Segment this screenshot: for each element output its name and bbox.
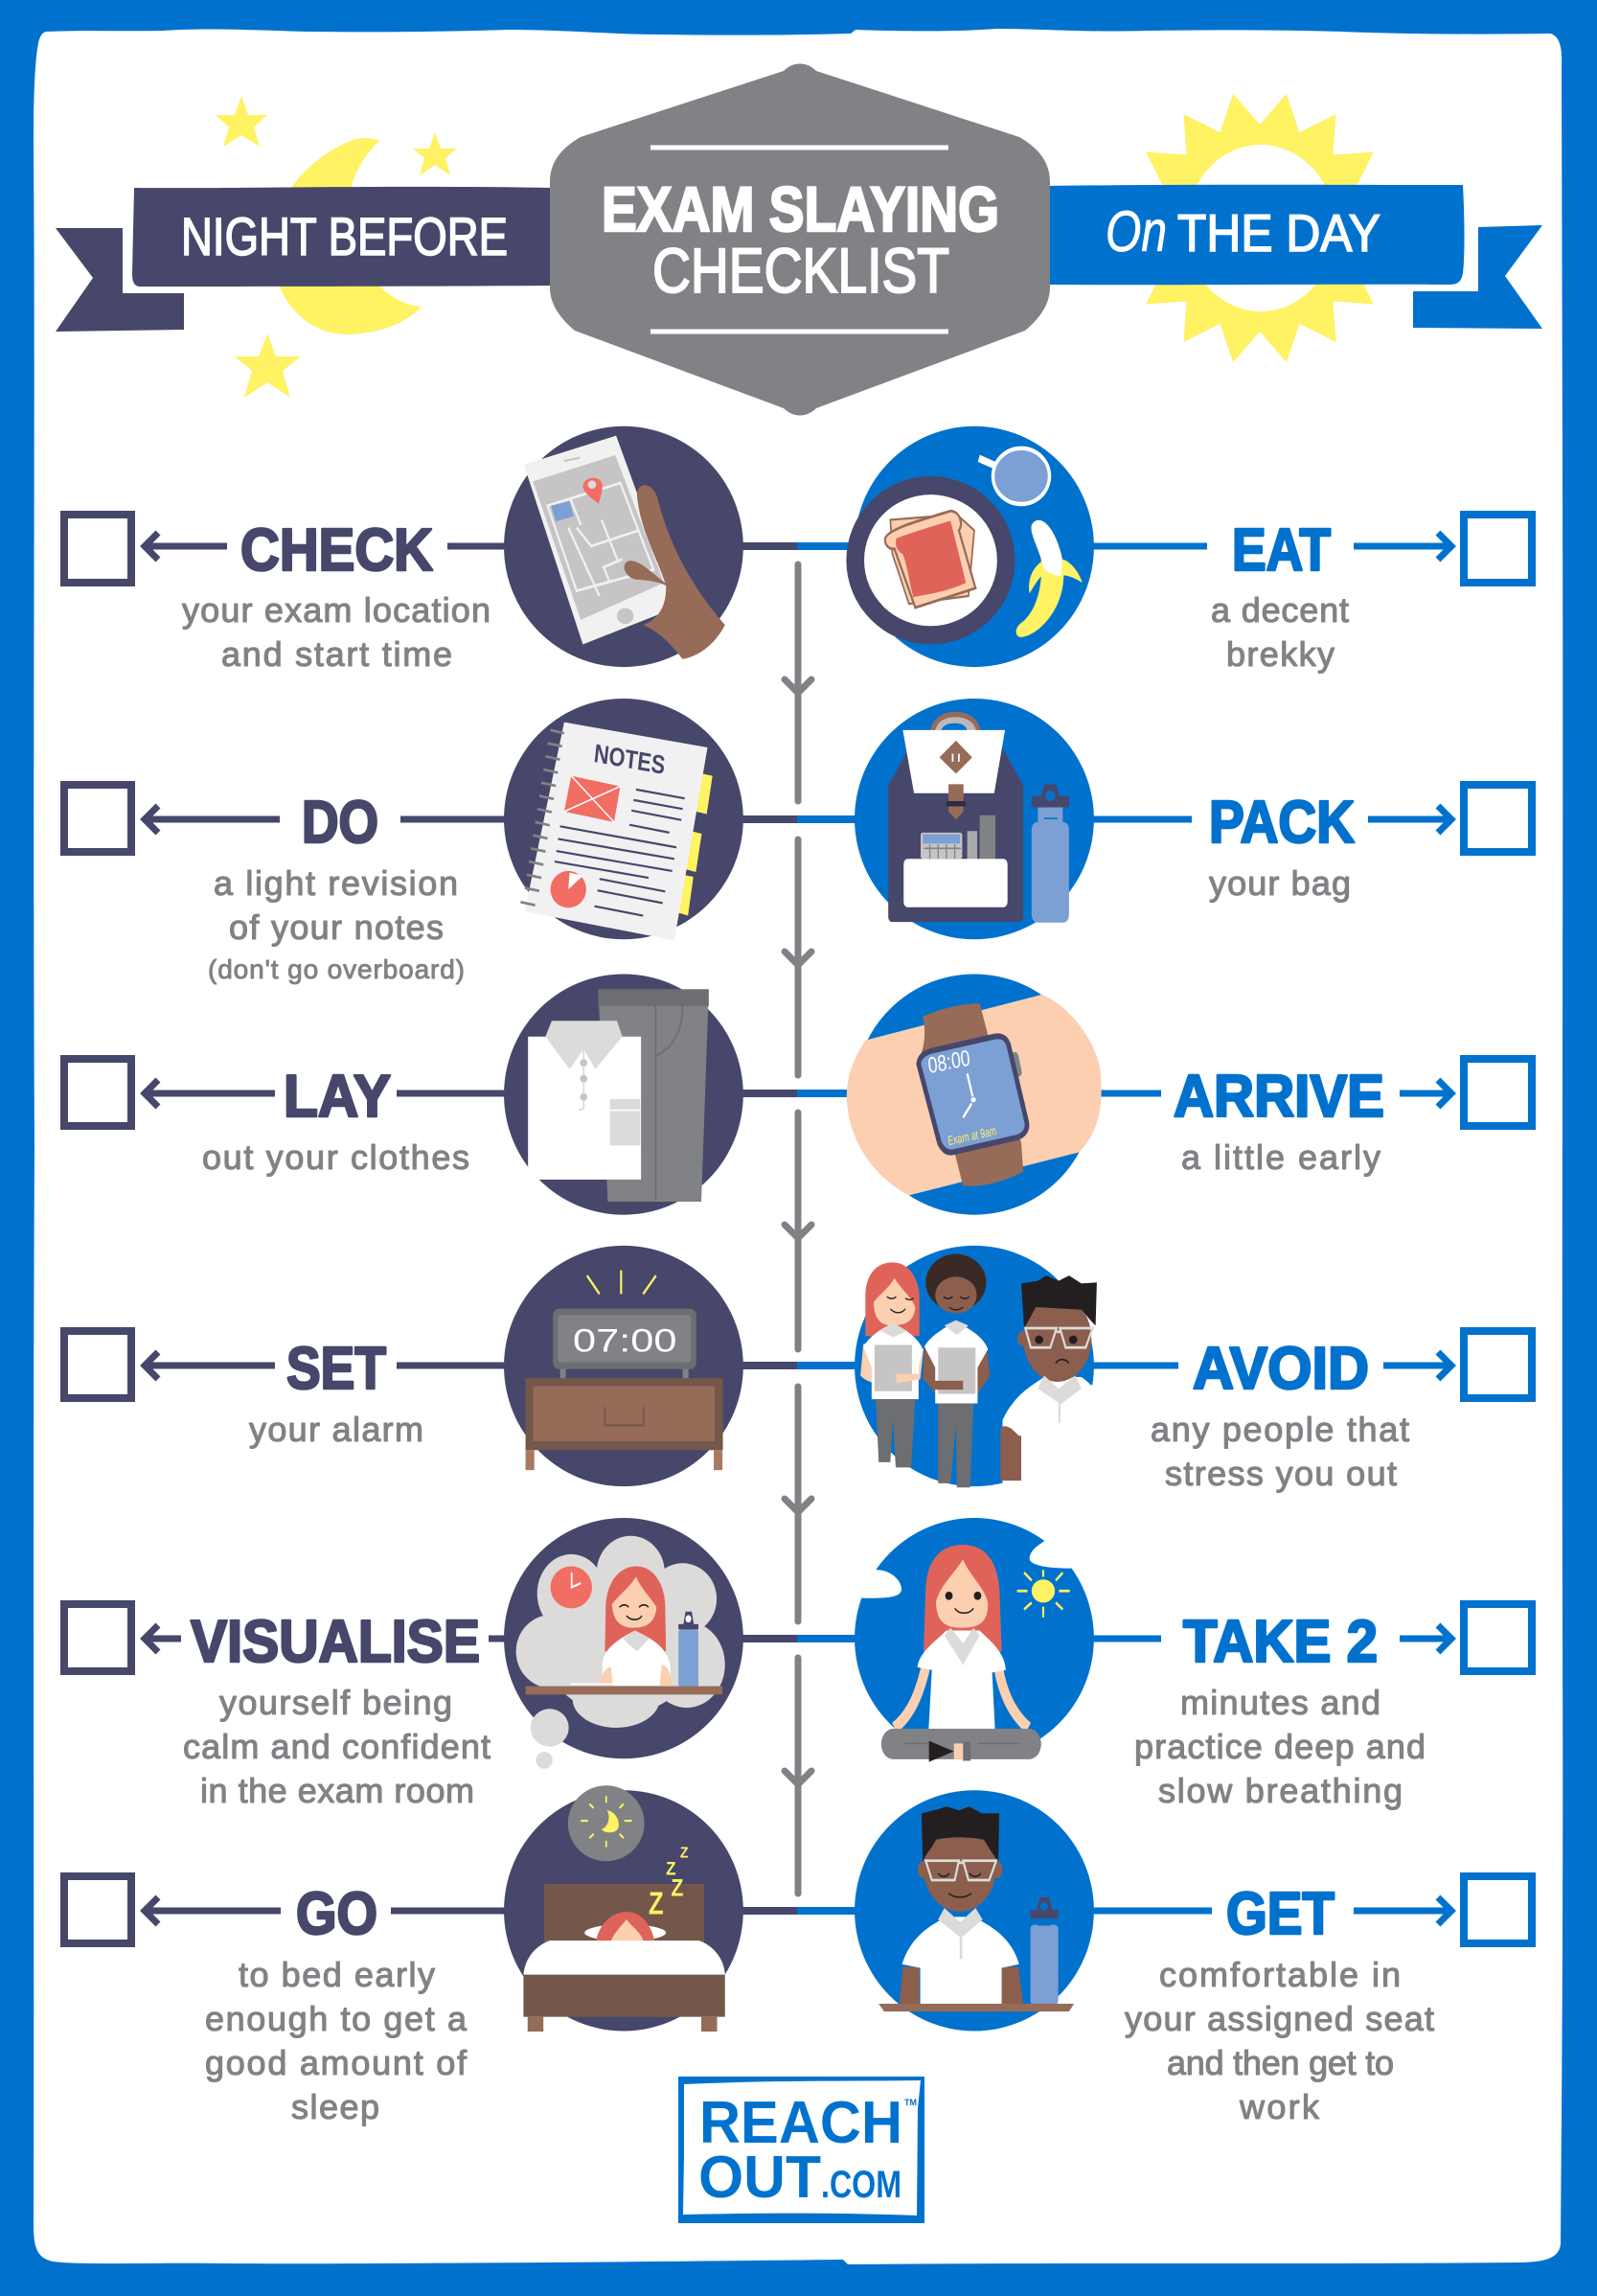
description: and start time xyxy=(221,634,452,674)
banner text: the day: THE DAY xyxy=(1177,203,1380,263)
description: calm and confident xyxy=(183,1727,491,1766)
checkbox xyxy=(64,1331,131,1398)
description xyxy=(208,863,465,984)
row 1 left: check xyxy=(64,515,508,674)
centre timeline arrows xyxy=(785,564,811,1894)
icon: breakfast xyxy=(846,426,1094,667)
heading: GO xyxy=(296,1881,377,1947)
description: slow breathing xyxy=(1158,1771,1403,1810)
arrow xyxy=(1400,1080,1451,1107)
icon: sun xyxy=(1126,94,1394,362)
checkbox xyxy=(1464,785,1532,852)
description xyxy=(1211,590,1349,674)
description xyxy=(1134,1683,1426,1810)
checkbox xyxy=(1464,1059,1532,1126)
checkbox xyxy=(1464,515,1532,583)
icon: sleeping in bed xyxy=(504,1785,743,2032)
heading: EAT xyxy=(1232,517,1331,584)
title rule bottom xyxy=(650,330,948,333)
logo text: reach: REACH xyxy=(699,2090,902,2156)
icon: smartwatch xyxy=(847,974,1102,1215)
title badge xyxy=(550,63,1050,416)
connector xyxy=(400,816,508,822)
arrow xyxy=(1354,1897,1451,1924)
description: out your clothes xyxy=(202,1137,469,1177)
watch caption: Exam at 9am xyxy=(947,1124,997,1149)
row 5 right: take 2 xyxy=(1090,1604,1532,1810)
description: brekky xyxy=(1226,634,1335,674)
description: and then get to xyxy=(1167,2043,1394,2082)
description: your alarm xyxy=(249,1410,423,1449)
icon: notes xyxy=(504,699,743,940)
connector xyxy=(397,1363,508,1368)
heading: LAY xyxy=(284,1064,391,1130)
heading: ARRIVE xyxy=(1174,1064,1384,1130)
connector xyxy=(1098,1091,1161,1096)
logo text: .com: .COM xyxy=(821,2164,901,2206)
description: a decent xyxy=(1211,590,1349,630)
connector xyxy=(391,1907,508,1915)
description: practice deep and xyxy=(1134,1727,1426,1766)
logo trademark: TM xyxy=(904,2098,917,2107)
description: of your notes xyxy=(229,907,444,947)
icon: clothes xyxy=(504,974,743,1215)
row 4 right: avoid xyxy=(1090,1331,1532,1493)
description: yourself being xyxy=(219,1683,452,1722)
heading: PACK xyxy=(1209,790,1355,856)
icon: star top xyxy=(216,96,267,147)
row 2 right: pack xyxy=(1090,785,1532,903)
arrow xyxy=(145,1352,275,1379)
description: in the exam room xyxy=(200,1771,474,1810)
icon: meditating student xyxy=(845,1518,1094,1762)
heading: TAKE 2 xyxy=(1183,1609,1378,1675)
connector xyxy=(397,1091,508,1096)
icon: visualising the exam xyxy=(504,1518,743,1769)
arrow xyxy=(145,1625,181,1652)
description: enough to get a xyxy=(205,1999,468,2038)
snooze letters xyxy=(649,1844,689,1921)
logo: reachout.com xyxy=(678,2077,924,2223)
snooze letters: Z xyxy=(680,1844,689,1861)
banner text: night before: NIGHT BEFORE xyxy=(181,206,508,266)
icon: stressed students xyxy=(855,1246,1103,1494)
icon: student at exam desk xyxy=(855,1790,1094,2031)
illustrations lower group xyxy=(504,1246,1103,2032)
ribbon tail: on the day xyxy=(1413,225,1542,329)
row 3 right: arrive xyxy=(1098,1059,1532,1177)
description: minutes and xyxy=(1180,1683,1380,1722)
snooze letters: Z xyxy=(671,1873,683,1901)
heading: GET xyxy=(1226,1881,1335,1947)
description: to bed early xyxy=(239,1955,435,1994)
arrow xyxy=(145,1080,275,1107)
icon: moon xyxy=(270,138,422,334)
row 3 left: lay xyxy=(64,1059,508,1177)
icon: alarm clock on nightstand xyxy=(504,1246,743,1486)
banner text: on: On xyxy=(1106,199,1167,264)
connector xyxy=(447,542,508,550)
watch time: 08:00 xyxy=(926,1045,971,1079)
description xyxy=(183,1683,491,1810)
row 4 left: set xyxy=(64,1331,508,1449)
icon: backpack xyxy=(855,699,1094,939)
description: a little early xyxy=(1181,1137,1380,1177)
description: a light revision xyxy=(214,863,458,903)
notes label: NOTES xyxy=(593,739,667,780)
checkbox xyxy=(64,1059,131,1126)
checkbox xyxy=(64,1876,131,1943)
heading: SET xyxy=(286,1336,386,1402)
banner: on the day xyxy=(1044,185,1464,285)
banner: night before xyxy=(132,187,556,287)
description: stress you out xyxy=(1165,1454,1397,1493)
description xyxy=(205,1955,468,2126)
arrow xyxy=(145,806,280,833)
checkbox xyxy=(1464,1604,1532,1671)
connector xyxy=(1090,1635,1161,1642)
connector xyxy=(1090,542,1207,550)
heading: CHECK xyxy=(240,517,433,584)
row 2 left: do xyxy=(64,785,508,984)
row 6 right: get xyxy=(1090,1876,1532,2126)
heading: AVOID xyxy=(1193,1336,1369,1402)
title rule top xyxy=(650,146,948,149)
description: your bag xyxy=(1209,863,1351,903)
arrow xyxy=(1368,806,1451,833)
checkbox xyxy=(64,1604,131,1671)
description xyxy=(182,590,491,674)
icon: phone and hand xyxy=(504,426,743,667)
logo text: out: OUT xyxy=(698,2145,821,2211)
arrow xyxy=(145,1897,281,1924)
description: sleep xyxy=(291,2087,379,2126)
snooze letters: Z xyxy=(666,1858,676,1879)
arrow xyxy=(1400,1625,1451,1652)
connector xyxy=(1090,816,1192,822)
description: (don't go overboard) xyxy=(208,954,465,984)
row 1 right: eat xyxy=(1090,515,1532,674)
description xyxy=(1151,1410,1409,1493)
title line 1: EXAM SLAYING xyxy=(602,173,999,244)
icon: star small xyxy=(413,132,457,175)
header: on the day side xyxy=(1044,94,1542,362)
description: your assigned seat xyxy=(1125,1999,1434,2038)
header: night before side xyxy=(56,96,556,398)
connector xyxy=(1090,1907,1212,1915)
snooze letters: Z xyxy=(649,1887,664,1921)
connector xyxy=(1090,1363,1178,1368)
description: your exam location xyxy=(182,590,491,630)
arrow xyxy=(1354,533,1451,560)
description: work xyxy=(1239,2087,1320,2126)
description xyxy=(1125,1955,1434,2126)
ribbon tail: night before xyxy=(56,228,184,332)
checkbox xyxy=(64,515,131,583)
description: comfortable in xyxy=(1159,1955,1401,1994)
icon: star bottom xyxy=(235,333,301,398)
arrow xyxy=(1383,1352,1451,1379)
clock time: 07:00 xyxy=(573,1323,676,1359)
illustrations upper group xyxy=(504,426,1102,1215)
row 6 left: go xyxy=(64,1876,508,2126)
checkbox xyxy=(1464,1331,1532,1398)
description: good amount of xyxy=(205,2043,468,2082)
checkbox xyxy=(64,785,131,852)
centre link lines xyxy=(738,546,862,1911)
connector xyxy=(489,1635,508,1642)
description: any people that xyxy=(1151,1410,1409,1449)
arrow xyxy=(145,533,227,560)
checkbox xyxy=(1464,1876,1532,1943)
heading: VISUALISE xyxy=(191,1609,480,1675)
title line 2: CHECKLIST xyxy=(652,235,949,306)
row 5 left: visualise xyxy=(64,1604,508,1810)
heading: DO xyxy=(302,790,378,856)
